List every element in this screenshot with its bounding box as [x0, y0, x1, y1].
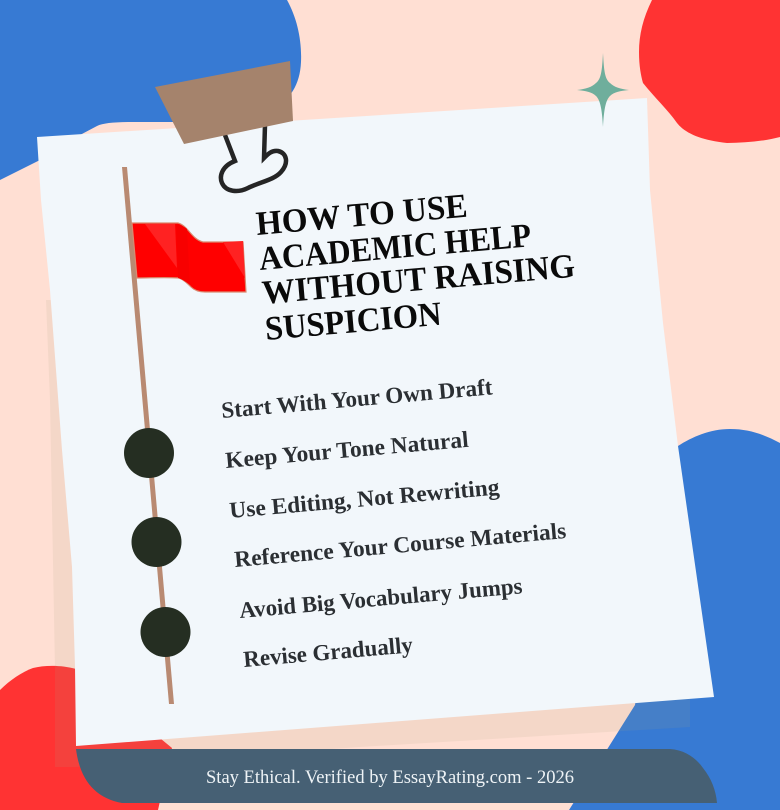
pole markers	[124, 428, 190, 657]
item 1: Start With Your Own Draft	[220, 374, 494, 423]
blob: red bottom left	[0, 666, 172, 810]
title: SUSPICION	[263, 296, 443, 348]
clip handle	[221, 125, 286, 191]
binder clip	[155, 61, 293, 191]
blob: blue top left	[0, 0, 301, 180]
item 5: Avoid Big Vocabulary Jumps	[238, 573, 523, 623]
sparkle icon	[577, 53, 629, 127]
footer text: Stay Ethical. Verified by EssayRating.com - 2026	[206, 767, 574, 788]
item 4: Reference Your Course Materials	[233, 518, 567, 572]
flag pole	[122, 167, 174, 704]
marker 3	[140, 607, 190, 657]
item 2: Keep Your Tone Natural	[224, 427, 470, 473]
title	[254, 188, 577, 348]
footer bar	[76, 749, 717, 803]
marker 1	[124, 428, 174, 478]
title: WITHOUT RAISING	[260, 248, 577, 312]
blob: blue lower right	[569, 429, 780, 810]
title: HOW TO USE	[254, 188, 469, 243]
item 6: Revise Gradually	[242, 632, 414, 672]
blob: red top right	[639, 0, 780, 143]
checklist	[220, 374, 567, 672]
marker 2	[132, 517, 182, 567]
clip body	[155, 61, 293, 144]
red flag	[132, 223, 246, 292]
paper shadow	[46, 300, 690, 767]
title: ACADEMIC HELP	[257, 217, 533, 278]
paper sheet	[37, 98, 714, 746]
item 3: Use Editing, Not Rewriting	[228, 474, 501, 523]
